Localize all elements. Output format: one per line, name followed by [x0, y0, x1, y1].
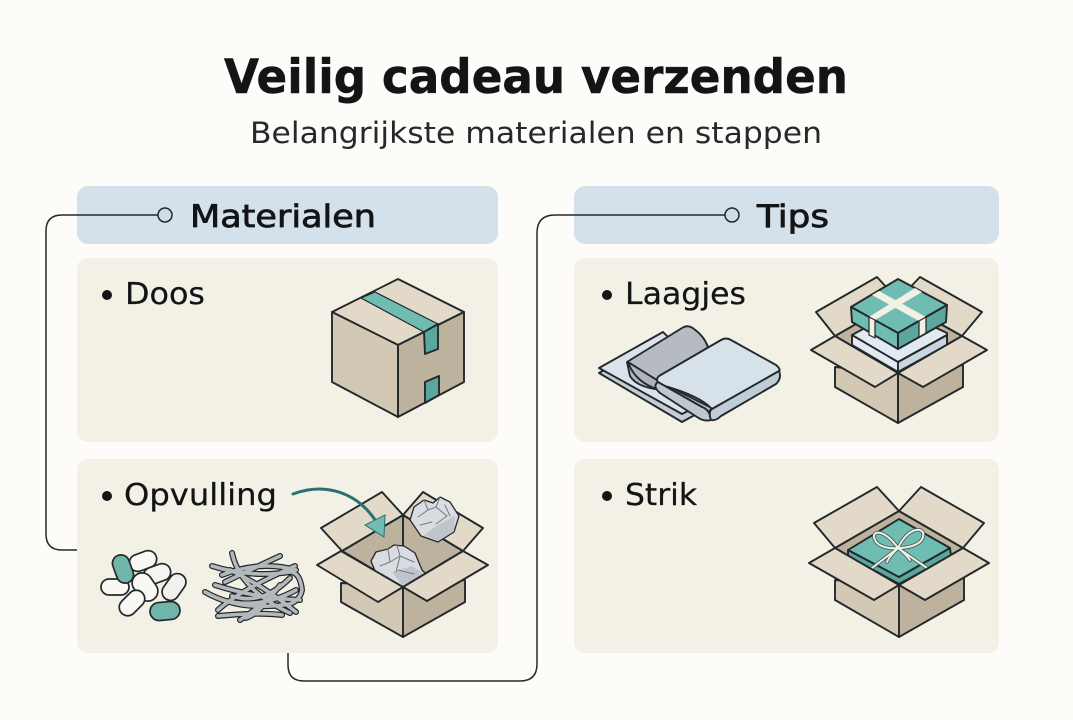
- icon: open box with layered gift: [811, 277, 987, 423]
- panel: Opvulling: [77, 459, 498, 653]
- panel: Laagjes: [574, 258, 999, 442]
- bullet label: Laagjes: Laagjes: [625, 277, 746, 312]
- panel: Doos: [77, 258, 498, 442]
- subtitle: Belangrijkste materialen en stappen: [250, 116, 822, 150]
- icon: folded wrapping layers: [599, 326, 780, 422]
- panel: Strik: [574, 459, 999, 653]
- icon: open box with gift and bow: [809, 487, 989, 637]
- icon: packing peanuts: [101, 548, 189, 621]
- panel: tips header: [574, 186, 999, 244]
- bullet label: Opvulling: Opvulling: [124, 478, 277, 513]
- arrow: into the box: [293, 489, 385, 537]
- icon: closed cardboard box with tape: [332, 279, 464, 417]
- bullet label: Strik: Strik: [625, 478, 698, 513]
- connector: Materialen header to Opvulling: [46, 208, 172, 550]
- connector: Opvulling to Tips header: [288, 208, 739, 681]
- heading: Tips: Tips: [756, 199, 829, 235]
- icon: open box with crumpled paper: [317, 492, 488, 637]
- bullet label: Doos: Doos: [125, 277, 205, 312]
- heading: Materialen: Materialen: [190, 199, 376, 235]
- panel: materialen header: [77, 186, 498, 244]
- icon: shredded paper: [205, 553, 302, 620]
- title: Veilig cadeau verzenden: [224, 50, 848, 105]
